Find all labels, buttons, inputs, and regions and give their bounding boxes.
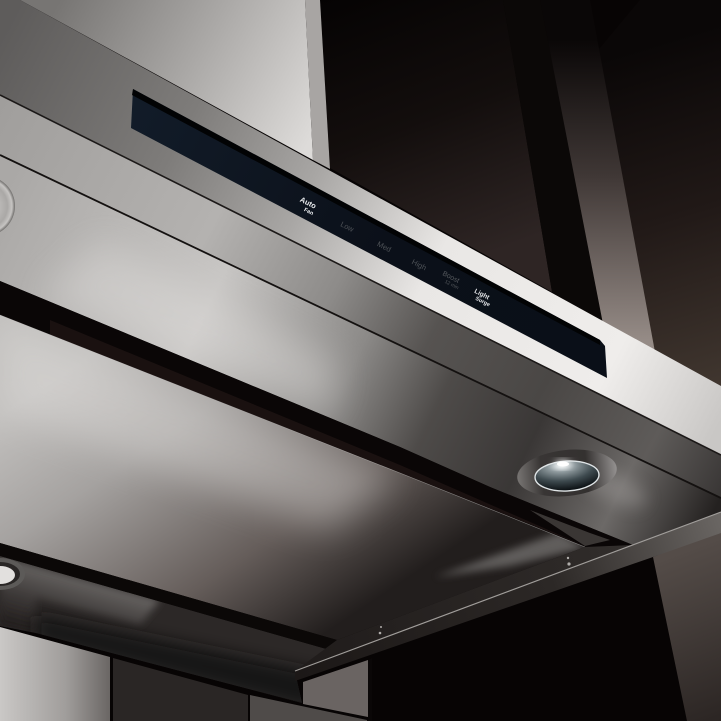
front rail [295,512,721,681]
hood front face [0,0,721,455]
button label: High: High [410,257,428,272]
right light fixture [515,445,619,501]
bottom wall tiles [0,627,372,721]
chimney wall panel [20,0,330,169]
button label: Auto Fan: Auto [298,195,318,211]
rail screws [379,557,571,634]
left edge switch [0,176,15,236]
button label: Light Surge: Surge [474,296,491,308]
button label: Auto Fan [298,195,318,217]
button label: Med: Med [376,239,393,254]
button label: Boost: Boost [441,270,460,285]
lower underside panel [0,556,337,710]
button label: Auto Fan: Fan [303,207,315,217]
underside filter panel [0,315,585,640]
hood lower band [0,155,721,545]
control display panel [131,89,607,378]
dark channel across underside [0,543,337,652]
button label: Boost [441,270,460,291]
button label: Low: Low [339,220,356,234]
right wall below hood [653,530,721,721]
left recessed light [0,558,25,590]
button label: Boost: 12 min [443,279,460,291]
hood middle band [0,95,721,498]
button label: Light Surge: Light [473,288,491,302]
button label: Light Surge [473,288,491,308]
dark slot under hood [0,281,633,547]
